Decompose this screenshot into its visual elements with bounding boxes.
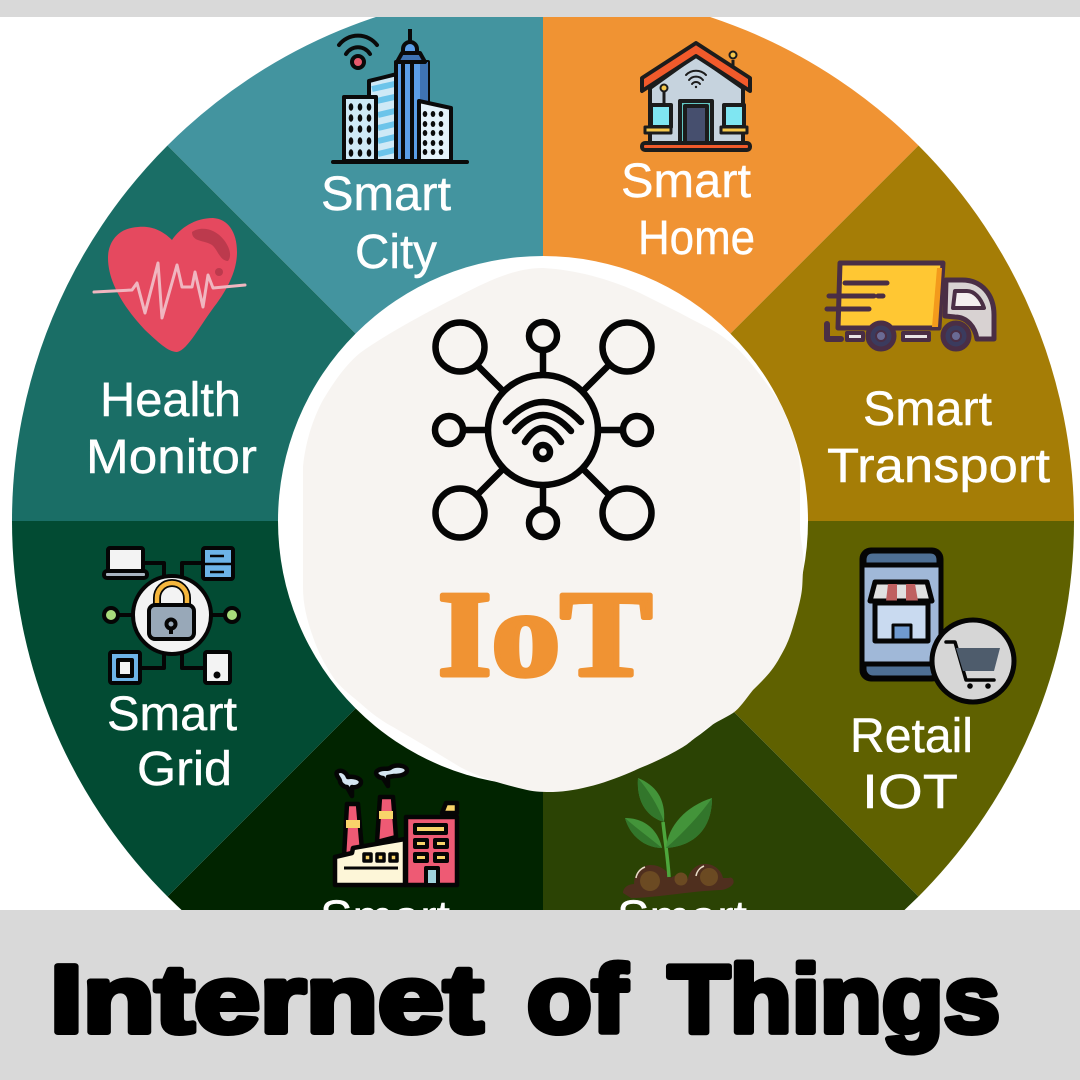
- sector: smart industry: [168, 521, 543, 1052]
- label: health monitor: Monitor: [86, 431, 257, 484]
- panel: smart agriculture: [543, 521, 918, 1052]
- panel: smart home: [543, 0, 918, 521]
- title: of: [527, 946, 628, 1053]
- label: health monitor: [86, 374, 257, 484]
- label: smart home: [621, 155, 755, 265]
- label: smart city: City: [355, 226, 437, 279]
- sector: health monitor: [12, 146, 543, 521]
- icon: sprout in soil: [623, 778, 734, 898]
- title: Things: [668, 946, 1000, 1053]
- icon: heart with pulse: [94, 218, 245, 352]
- label: smart grid: [107, 688, 237, 796]
- icon: iot network hub: [435, 322, 652, 538]
- center hub: [278, 256, 808, 792]
- panel: retail iot: [543, 521, 1074, 896]
- label: smart agriculture: Smart: [617, 892, 747, 945]
- label: health monitor: Health: [100, 374, 241, 427]
- sector: smart home: [543, 0, 918, 521]
- sector: smart grid: [12, 521, 543, 896]
- label: retail iot: Retail: [850, 710, 973, 763]
- sector: smart transport: [543, 146, 1074, 521]
- label: smart city: [321, 168, 451, 279]
- panel: smart transport: [543, 146, 1074, 521]
- sector: smart agriculture: [543, 521, 918, 1052]
- icon: retail phone and cart: [862, 550, 1014, 702]
- center cream blob: [303, 268, 804, 792]
- bottom title banner: [0, 910, 1080, 1080]
- panel: smart grid: [12, 521, 543, 896]
- icon: smart grid secure network: [104, 548, 239, 683]
- title: Internet: [50, 946, 483, 1053]
- label: smart grid: Smart: [107, 688, 237, 741]
- label: smart home: Home: [638, 212, 755, 265]
- heading: IoT: IoT: [438, 567, 652, 702]
- label: retail iot: [850, 710, 973, 819]
- panel: smart city: [168, 0, 543, 521]
- label: smart transport: [827, 383, 1050, 493]
- label: smart transport: Smart: [863, 383, 992, 436]
- label: retail iot: IOT: [862, 766, 958, 819]
- sector: smart city: [168, 0, 543, 521]
- icon: delivery truck: [827, 263, 994, 349]
- panel: smart industry: [168, 521, 543, 1052]
- icon: smart city skyline: [333, 29, 467, 162]
- icon: factory: [335, 766, 457, 885]
- label: smart city: Smart: [321, 168, 451, 221]
- label: smart transport: Transport: [827, 440, 1050, 493]
- center white disc: [278, 256, 808, 786]
- label: smart industry: Smart: [320, 892, 450, 945]
- label: smart home: Smart: [621, 155, 751, 208]
- icon: smart home house: [642, 43, 750, 150]
- top grey band: [0, 0, 1080, 17]
- panel: health monitor: [12, 146, 543, 521]
- sector: retail iot: [543, 521, 1074, 896]
- label: smart grid: Grid: [137, 743, 232, 796]
